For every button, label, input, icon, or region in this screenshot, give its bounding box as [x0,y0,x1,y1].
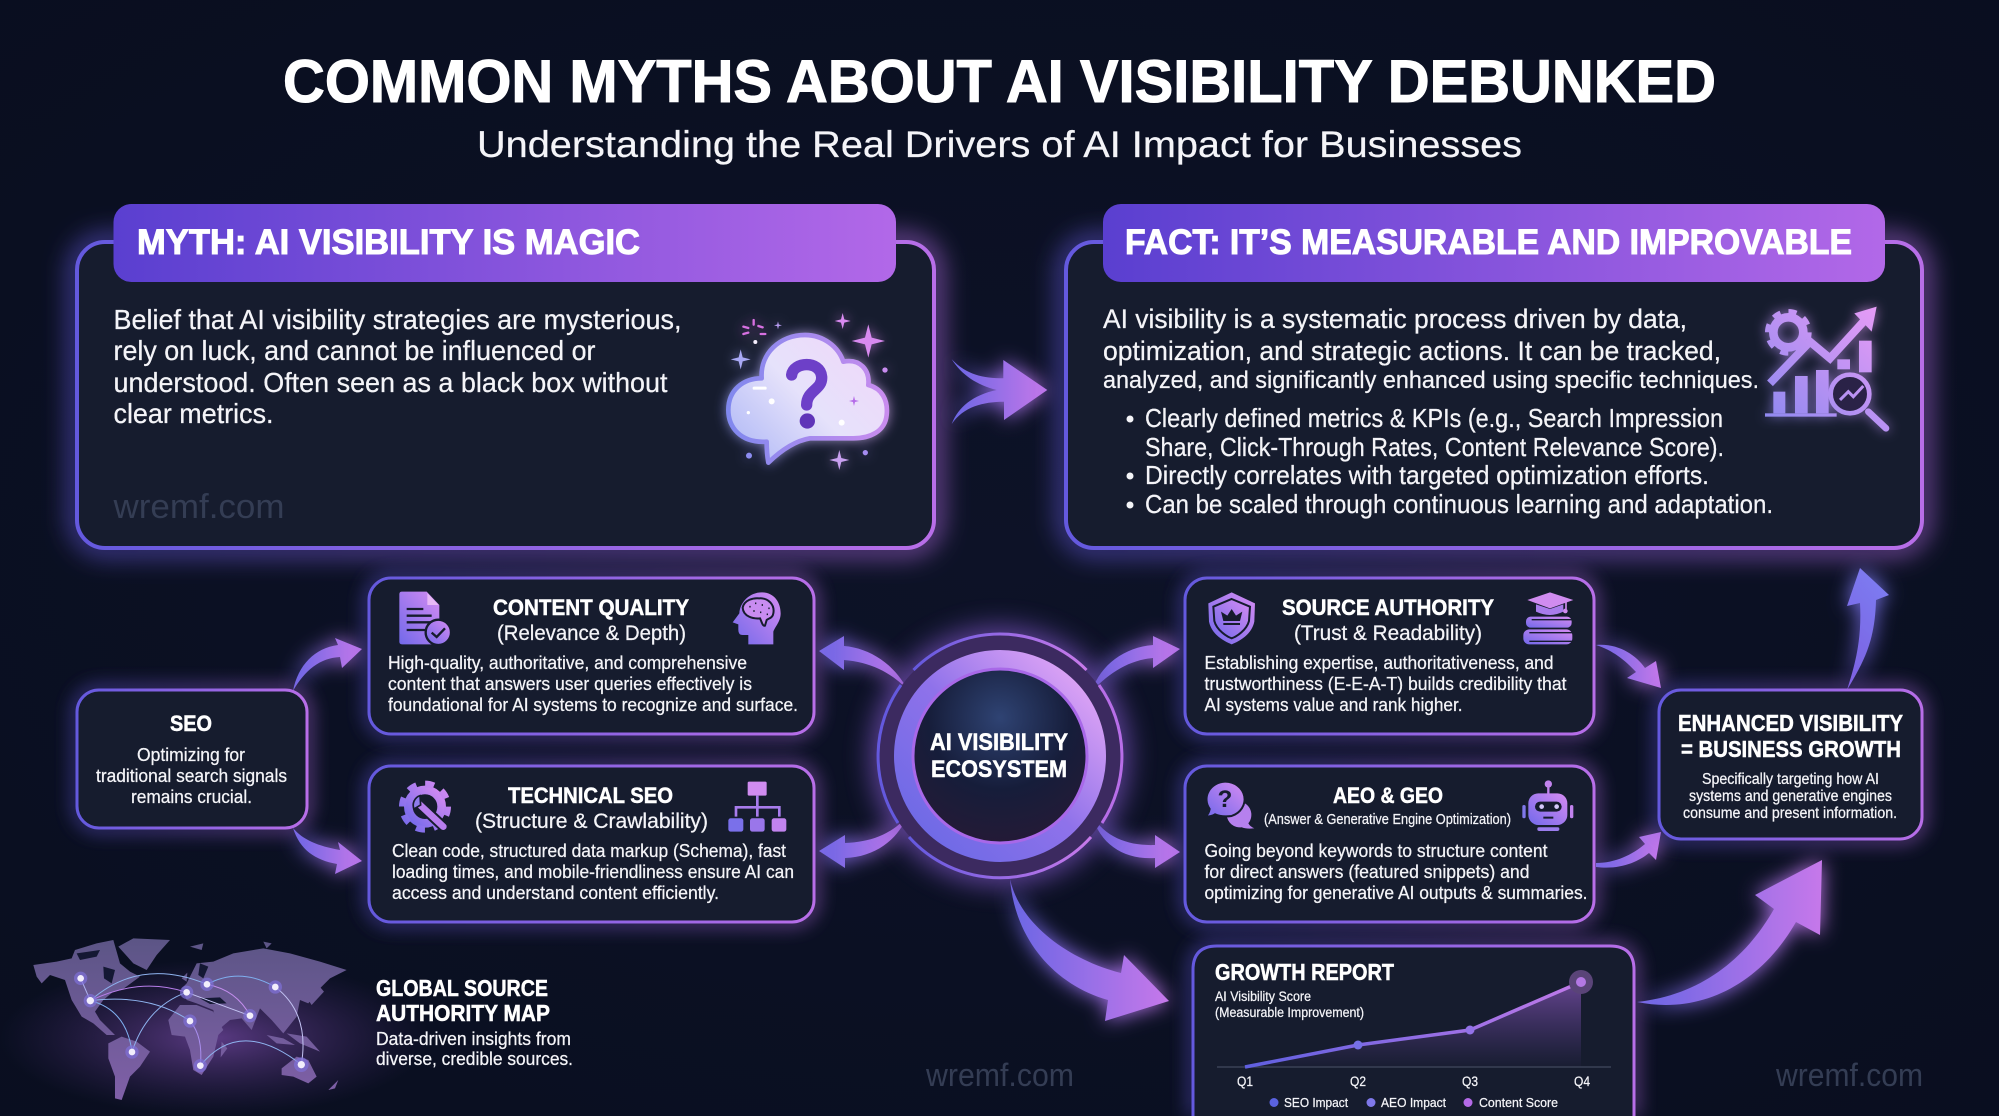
arrow: ecosystem to growth report [1010,879,1169,1021]
hub: AI visibility ecosystem [870,626,1130,886]
icon: hierarchy diagram [728,782,786,832]
AEO and GEO body: Going beyond keywords to structure content [1204,841,1548,861]
content quality heading: CONTENT QUALITY [493,595,689,620]
AEO and GEO subheading: (Answer & Generative Engine Optimization) [1264,811,1511,828]
fact bullet list: Clearly defined metrics & KPIs (e.g., Search Impression [1145,403,1723,433]
arrow: ecosystem to technical SEO [819,817,907,868]
chart subtitle: AI Visibility Score [1215,989,1311,1004]
panel: enhanced visibility: Specifically targeting how AI [1702,771,1879,788]
source nodes [74,972,309,1072]
hub: AI visibility ecosystem: AI VISIBILITY [930,729,1068,756]
panel: enhanced visibility: consume and present information. [1683,805,1897,822]
panel: SEO: Optimizing for [137,745,245,765]
panel: enhanced visibility: = BUSINESS GROWTH [1681,736,1901,762]
fact bullet list: Share, Click-Through Rates, Content Relevance Score). [1145,432,1724,462]
arrow: myth to fact [952,359,1047,424]
icon: gear with wrench [402,784,448,829]
content quality body: High-quality, authoritative, and comprehensive [388,653,747,673]
panel: growth report [1193,946,1634,1116]
myth description [114,304,682,429]
continents [33,938,347,1100]
chart legend: SEO Impact [1284,1095,1348,1110]
myth description: rely on luck, and cannot be influenced or [114,335,596,366]
myth header bar [114,204,896,282]
title: COMMON MYTHS ABOUT AI VISIBILITY DEBUNKED [283,48,1716,115]
panel: AEO and GEO [1185,766,1594,922]
connection arcs [81,974,303,1066]
global source authority map caption: GLOBAL SOURCE [376,975,548,1001]
source authority subheading: (Trust & Readability) [1294,622,1482,645]
subtitle: Understanding the Real Drivers of AI Impact for Businesses [477,124,1522,165]
panel: source authority [1185,578,1594,734]
fact description: analyzed, and significantly enhanced using specific techniques. [1103,367,1759,394]
AEO and GEO body: optimizing for generative AI outputs & summaries. [1204,883,1588,903]
global source authority map caption: Data-driven insights from [376,1029,571,1049]
icon: document with check [399,592,451,645]
technical SEO body: access and understand content efficiently. [392,883,719,903]
fact description [1103,304,1759,394]
chart legend: Content Score [1479,1095,1558,1110]
AEO and GEO body [1204,841,1588,903]
global source authority map caption: diverse, credible sources. [376,1049,573,1069]
AEO and GEO body: for direct answers (featured snippets) and [1204,862,1530,882]
myth description: Belief that AI visibility strategies are mysterious, [114,304,682,335]
panel: myth [77,204,934,548]
source authority body: Establishing expertise, authoritativeness, and [1204,653,1554,673]
panel: SEO [77,690,307,828]
content quality body: content that answers user queries effectively is [388,674,752,694]
arrow: ecosystem to AEO and GEO [1092,815,1180,868]
arrow: SEO to technical SEO [293,828,362,874]
icon: question speech bubbles: ? [1218,786,1232,813]
line chart: Q4 [1574,1074,1590,1089]
fact description: optimization, and strategic actions. It can be tracked, [1103,336,1721,366]
icon: magic cloud with question mark [728,313,888,470]
panel: technical SEO [369,766,814,922]
arrow: AEO and GEO to enhanced visibility [1596,832,1661,868]
line chart: Q2 [1350,1074,1366,1089]
arrow: enhanced visibility upward to fact [1847,568,1889,690]
icon: gear, growth chart and magnifier [1765,307,1886,428]
arrow: source authority to enhanced visibility [1596,645,1661,688]
fact bullet list: Can be scaled through continuous learning and adaptation. [1145,489,1773,519]
chart subtitle [1215,989,1364,1020]
content quality body [388,653,798,715]
line chart: Q1 [1237,1074,1253,1089]
source authority body [1204,653,1566,715]
technical SEO heading: TECHNICAL SEO [508,783,673,808]
background glow under world map [0,960,430,1116]
global source authority map caption: AUTHORITY MAP [376,1000,550,1026]
chart subtitle: (Measurable Improvement) [1215,1005,1364,1020]
panel: SEO: traditional search signals [96,766,287,786]
source authority body: trustworthiness (E-E-A-T) builds credibility that [1204,674,1566,694]
panel: enhanced visibility [1659,690,1922,839]
fact header bar [1103,204,1885,282]
panel: fact [1066,204,1922,548]
panel: SEO: remains crucial. [131,787,252,807]
icon: question speech bubbles [1206,782,1254,829]
fact description: AI visibility is a systematic process driven by data, [1103,304,1687,334]
icon: head with brain [733,592,781,644]
arrow: ecosystem to source authority [1092,636,1180,691]
world map with connection arcs [33,938,347,1100]
source authority body: AI systems value and rank higher. [1204,695,1462,715]
technical SEO body [392,841,794,903]
global source authority map caption [376,975,573,1069]
watermark: center: wremf.com [925,1057,1074,1093]
technical SEO body: Clean code, structured data markup (Schema), fast [392,841,786,861]
growth report heading: GROWTH REPORT [1215,959,1394,985]
line chart [1217,970,1611,1089]
panel: enhanced visibility: systems and generative engines [1689,788,1892,805]
fact bullet list [1126,403,1773,519]
panel: SEO: SEO [170,711,212,736]
watermark: wremf.com [112,488,284,526]
content quality subheading: (Relevance & Depth) [497,622,686,645]
source authority heading: SOURCE AUTHORITY [1282,595,1494,620]
arrow: SEO to content quality [293,638,362,691]
line chart: Q3 [1462,1074,1478,1089]
dark inland seas [77,950,227,1004]
myth description: understood. Often seen as a black box without [114,367,668,398]
icon: graduation cap on books [1523,592,1573,644]
watermark: right: wremf.com [1775,1057,1923,1093]
content quality body: foundational for AI systems to recognize and surface. [388,695,798,715]
panel: enhanced visibility: ENHANCED VISIBILITY [1678,710,1903,736]
AEO and GEO heading: AEO & GEO [1333,783,1443,808]
hub: AI visibility ecosystem: ECOSYSTEM [931,756,1067,783]
technical SEO body: loading times, and mobile-friendliness ensure AI can [392,862,794,882]
icon: robot [1522,780,1573,831]
arrow: growth report to enhanced visibility [1637,860,1822,1005]
chart legend [1270,1095,1558,1110]
technical SEO subheading: (Structure & Crawlability) [475,810,708,833]
fact header bar: FACT: IT’S MEASURABLE AND IMPROVABLE [1125,223,1852,262]
fact bullet list: Directly correlates with targeted optimization efforts. [1145,460,1709,490]
myth header bar: MYTH: AI VISIBILITY IS MAGIC [137,223,640,262]
arrow: ecosystem to content quality [819,636,907,689]
myth description: clear metrics. [114,398,274,429]
panel: content quality [369,578,814,734]
chart legend: AEO Impact [1381,1095,1446,1110]
icon: shield with crown [1208,592,1255,644]
